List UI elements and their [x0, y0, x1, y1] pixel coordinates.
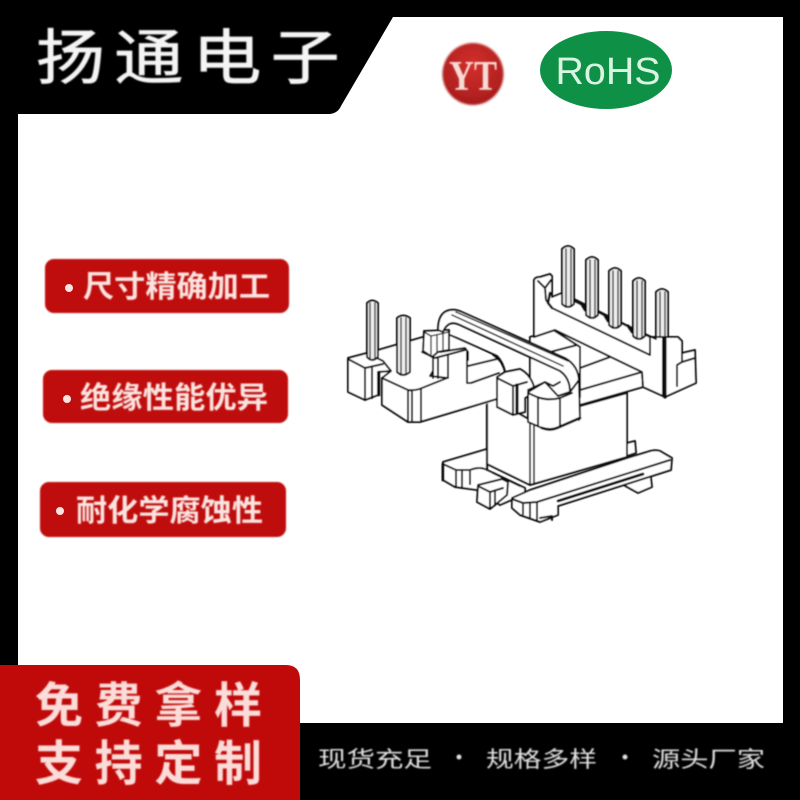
feature tag: 尺寸精确加工 — [45, 259, 289, 313]
icon: YT logo — [442, 43, 504, 105]
feature tag: 耐化学腐蚀性: 耐化学腐蚀性 — [76, 495, 263, 528]
left pins — [367, 300, 410, 375]
feature tag: 耐化学腐蚀性 — [40, 482, 286, 537]
feature tag: 尺寸精确加工: 尺寸精确加工 — [83, 271, 270, 304]
locating tab — [477, 479, 508, 509]
front right block — [528, 380, 580, 430]
promo line: 支持定制: 支持定制 — [35, 738, 262, 791]
promo box — [0, 665, 300, 800]
product drawing: transformer bobbin — [348, 246, 696, 522]
footer slogan: 现货充足 — [318, 747, 432, 772]
front small block — [493, 355, 535, 415]
icon: RoHS badge: RoHS — [556, 51, 660, 93]
right pin wall — [534, 274, 696, 397]
footer slogan — [318, 747, 765, 772]
left flange — [378, 333, 505, 422]
footer slogan: 源头厂家 — [652, 747, 765, 772]
coil core — [487, 393, 627, 485]
footer slogan: 规格多样 — [486, 747, 597, 772]
icon: YT logo: YT — [449, 54, 497, 100]
brand title: 扬通电子 — [36, 24, 340, 92]
bottom flange right — [512, 441, 672, 522]
bottom flange left — [443, 449, 525, 505]
left corner block — [348, 353, 391, 400]
right pins — [562, 246, 668, 339]
top plate — [530, 330, 643, 420]
left post block — [423, 330, 449, 357]
icon: RoHS badge — [540, 31, 672, 109]
feature tag: 绝缘性能优异: 绝缘性能优异 — [80, 382, 268, 415]
arched strap — [438, 310, 579, 420]
feature tag: 绝缘性能优异 — [43, 370, 288, 423]
promo line: 免费拿样: 免费拿样 — [35, 680, 262, 733]
